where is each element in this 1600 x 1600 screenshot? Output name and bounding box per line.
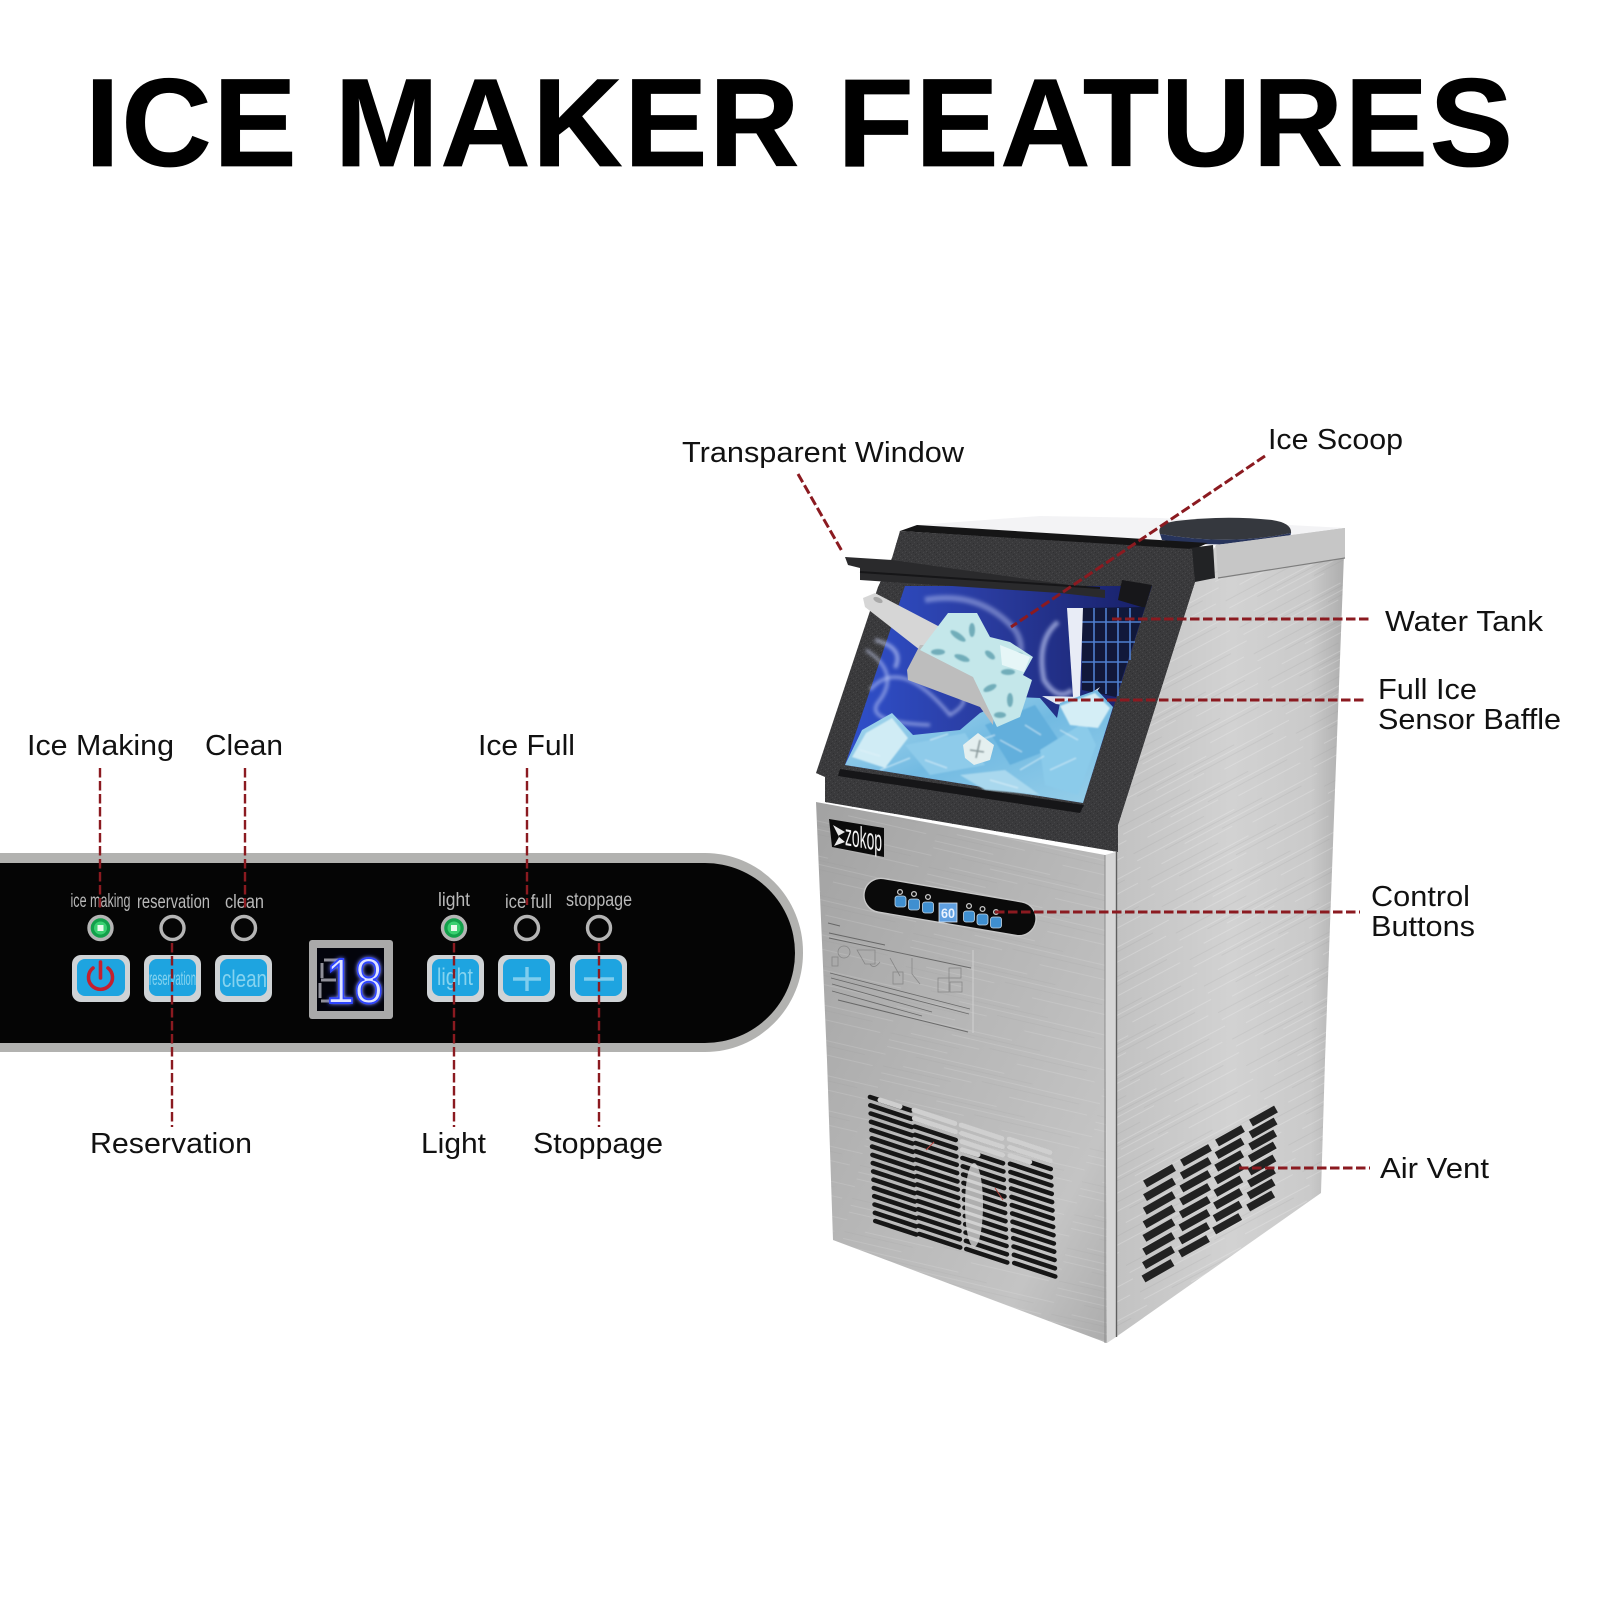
label: Ice Scoop: Ice Scoop — [1268, 424, 1403, 456]
ice maker machine — [27, 424, 1561, 1343]
hood frame — [816, 525, 1215, 852]
loose ice cube — [963, 733, 994, 765]
label: Clean: Clean — [205, 730, 283, 762]
leader lines: control panel — [100, 768, 599, 1127]
label: Full Ice Sensor Baffle: Sensor Baffle — [1378, 704, 1561, 736]
label: Full Ice Sensor Baffle: Full Ice — [1378, 674, 1477, 706]
button: plus — [498, 955, 555, 1002]
control panel close-up — [0, 853, 803, 1052]
button: light — [427, 955, 484, 1002]
label: Stoppage: Stoppage — [533, 1128, 663, 1160]
button: clean — [215, 955, 272, 1002]
front panel — [816, 802, 1116, 1343]
top cover — [917, 516, 1345, 546]
panel bezel and face — [0, 853, 803, 1052]
label: Full Ice Sensor Baffle — [1378, 674, 1561, 736]
side panel — [1116, 528, 1345, 1337]
ice floor — [845, 690, 1113, 803]
ice scoop — [863, 593, 997, 725]
mini control panel — [861, 876, 1039, 938]
side air vents — [1144, 1109, 1276, 1279]
top handle lip — [845, 557, 1105, 598]
label: Air Vent: Air Vent — [1380, 1153, 1489, 1185]
indicator labels — [70, 890, 632, 913]
seven-segment display: 18 — [326, 945, 383, 1017]
indicator labels: stoppage — [566, 890, 632, 911]
transparent window — [816, 557, 1276, 1343]
button: minus — [570, 955, 627, 1002]
button: power — [72, 955, 130, 1002]
title: ICE MAKER FEATURES — [85, 54, 1513, 193]
indicator labels: reservation — [137, 892, 210, 913]
full ice sensor baffle — [1042, 608, 1100, 708]
indicator LEDs — [89, 916, 610, 940]
mini control panel: 60 — [941, 905, 955, 921]
label: Control Buttons: Buttons — [1371, 911, 1475, 943]
label: Control Buttons — [1371, 881, 1475, 943]
scoop ice cubes — [920, 613, 1033, 727]
wire ice grid — [1082, 607, 1145, 697]
label: Light: Light — [421, 1128, 486, 1160]
dark corner — [1118, 580, 1152, 608]
indicator labels: ice full — [505, 892, 552, 913]
instruction sticker — [828, 923, 973, 1033]
transparent window: zokop — [845, 819, 882, 858]
indicator labels: light — [438, 890, 471, 911]
indicator labels: ice making — [70, 891, 130, 912]
button: clean: clean — [222, 966, 267, 993]
label: Ice Making: Ice Making — [27, 730, 174, 762]
leader lines: machine — [798, 456, 1370, 1168]
seven-segment display — [309, 940, 393, 1019]
brand logo — [829, 819, 884, 858]
label: Reservation: Reservation — [90, 1128, 252, 1160]
label: Control Buttons: Control — [1371, 881, 1470, 913]
button: reservation: reservation — [149, 969, 196, 990]
label: Ice Full: Ice Full — [478, 730, 575, 762]
front air vents — [870, 1097, 1055, 1276]
label: Water Tank: Water Tank — [1385, 606, 1544, 638]
window sill — [838, 769, 1084, 813]
indicator labels: clean — [225, 892, 264, 913]
button: light: light — [437, 964, 473, 991]
label: Transparent Window: Transparent Window — [682, 437, 965, 469]
button: reservation — [144, 955, 201, 1002]
water cap — [1159, 518, 1291, 544]
